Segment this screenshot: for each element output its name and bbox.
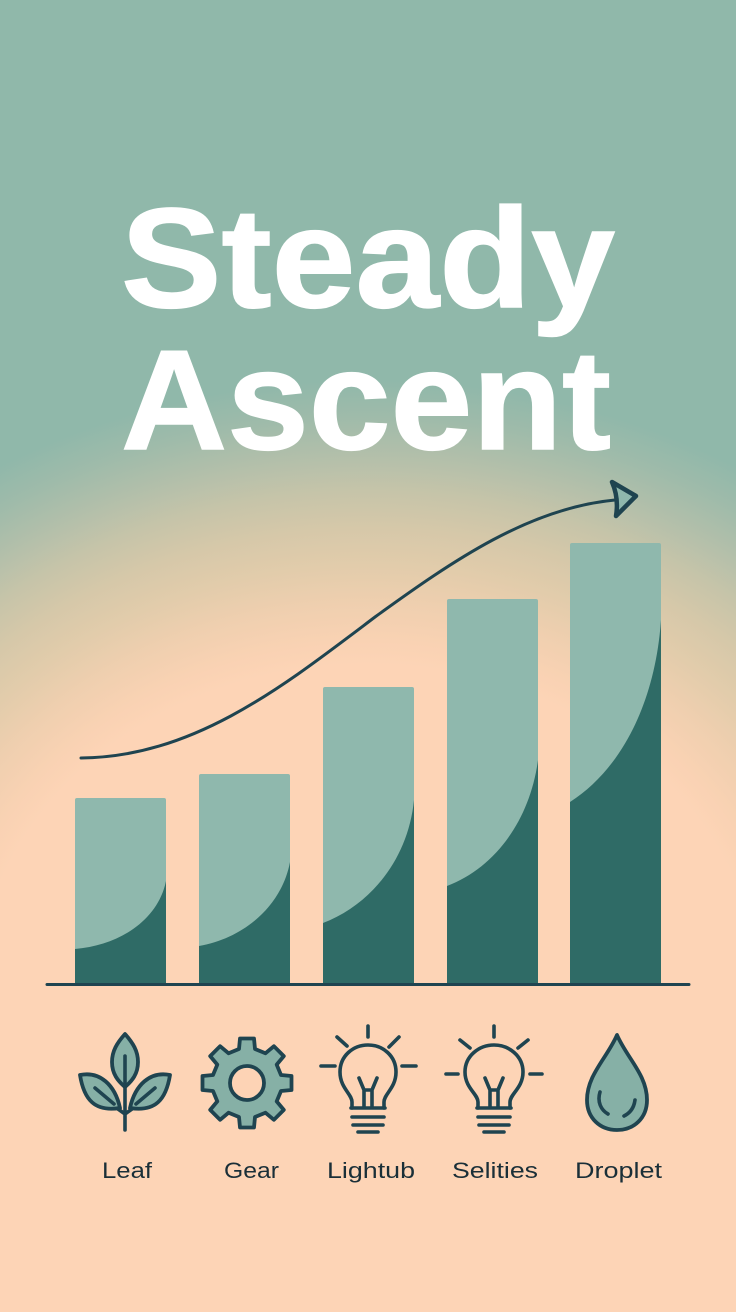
bar 1 — [75, 798, 166, 983]
icon labels: Droplet — [575, 1158, 662, 1183]
bar 2 — [199, 774, 290, 983]
icon: second lightbulb — [446, 1026, 542, 1132]
trend arrow — [81, 482, 636, 758]
icon: leaf — [80, 1034, 170, 1130]
title: Ascent — [121, 321, 611, 480]
icon: gear — [202, 1038, 292, 1128]
icon labels: Lightub — [327, 1158, 415, 1183]
chart baseline — [47, 983, 689, 986]
title: Steady — [121, 179, 615, 338]
icon: lightbulb — [321, 1026, 416, 1132]
bar chart — [47, 543, 689, 984]
bar 4 — [447, 599, 538, 983]
icon: droplet — [587, 1035, 647, 1130]
bar 5 — [570, 543, 661, 983]
icon labels: Gear — [224, 1158, 279, 1183]
icon labels — [102, 1158, 662, 1183]
bar 3 — [323, 687, 414, 983]
title — [121, 179, 615, 480]
icon labels: Leaf — [102, 1158, 153, 1183]
icon labels: Selities — [452, 1158, 538, 1183]
